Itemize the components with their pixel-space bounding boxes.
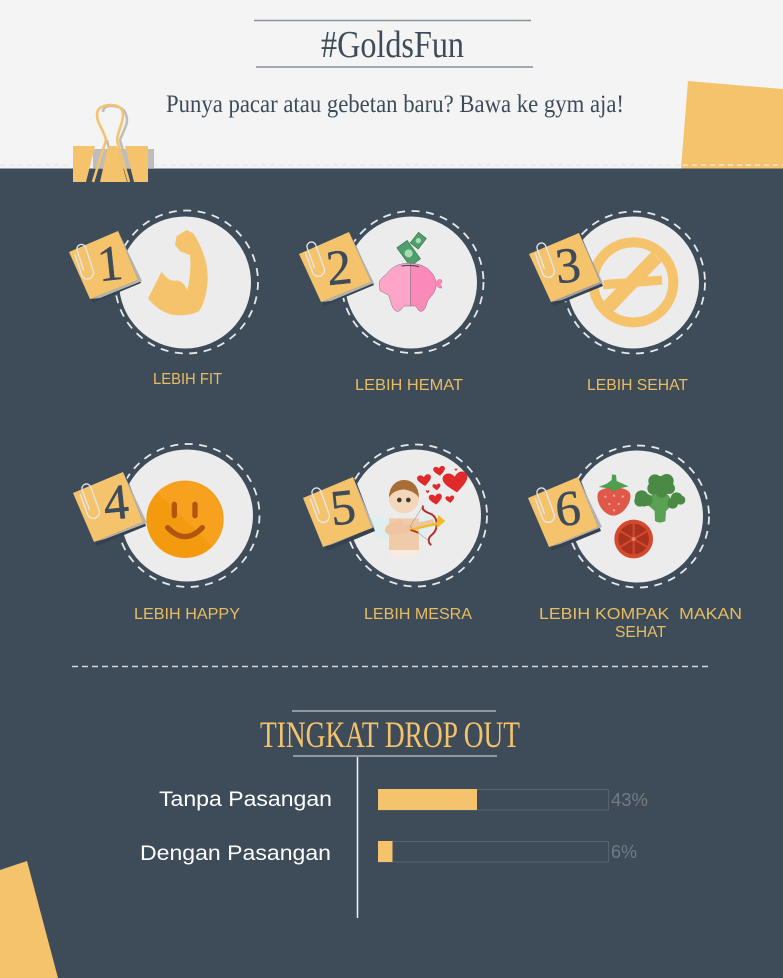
label xyxy=(539,606,742,641)
card 2: lebih hemat xyxy=(299,211,484,394)
note 3 xyxy=(529,233,603,306)
row: dengan pasangan: 6% xyxy=(611,842,637,862)
icon: strawberry, broccoli, tomato xyxy=(597,474,685,558)
card 6: lebih kompak makan sehat xyxy=(528,446,742,641)
card 5: lebih mesra xyxy=(303,444,487,623)
note 5 xyxy=(303,477,375,551)
note 2: 2 xyxy=(324,238,354,296)
label: LEBIH HAPPY xyxy=(134,606,240,623)
note 3: 3 xyxy=(553,236,583,294)
label: SEHAT xyxy=(615,624,666,641)
card 1: lebih fit xyxy=(69,210,258,388)
sticky note: bottom left xyxy=(0,861,58,978)
header panel xyxy=(0,0,783,168)
note 1 xyxy=(69,231,142,303)
note 6 xyxy=(528,477,602,551)
note 6: 6 xyxy=(553,479,583,537)
row: dengan pasangan xyxy=(140,841,637,865)
label: LEBIH KOMPAK MAKAN xyxy=(539,606,742,623)
row: tanpa pasangan: Tanpa Pasangan xyxy=(159,788,332,811)
row: tanpa pasangan xyxy=(159,788,648,811)
icon: cupid with bow and hearts xyxy=(365,466,469,558)
icon: smiley xyxy=(146,481,224,558)
label: LEBIH FIT xyxy=(153,371,222,388)
icon: flexed arm xyxy=(148,230,208,315)
label: LEBIH SEHAT xyxy=(587,377,688,394)
note 4: 4 xyxy=(101,473,131,531)
icon: no smoking xyxy=(593,242,673,322)
note 4 xyxy=(73,472,147,546)
title rule lines and hashtag: #GoldsFun xyxy=(321,24,464,66)
subtitle: Punya pacar atau gebetan baru? Bawa ke gym aja! xyxy=(166,91,624,118)
label: LEBIH MESRA xyxy=(364,606,472,623)
sticky note: top right xyxy=(681,81,783,168)
card 4: lebih happy xyxy=(73,444,260,623)
label: LEBIH HEMAT xyxy=(355,377,463,394)
note 1: 1 xyxy=(95,234,125,292)
note 2 xyxy=(299,232,374,306)
icon: piggy bank with money xyxy=(379,232,442,311)
note 5: 5 xyxy=(328,478,358,536)
row: tanpa pasangan: 43% xyxy=(611,790,648,810)
row: dengan pasangan: Dengan Pasangan xyxy=(140,842,331,865)
icon: binder clip xyxy=(73,105,154,182)
card 3: lebih sehat xyxy=(529,212,705,394)
heading: tingkat drop out: TINGKAT DROP OUT xyxy=(260,715,520,756)
bar chart: drop out rate xyxy=(140,757,648,918)
